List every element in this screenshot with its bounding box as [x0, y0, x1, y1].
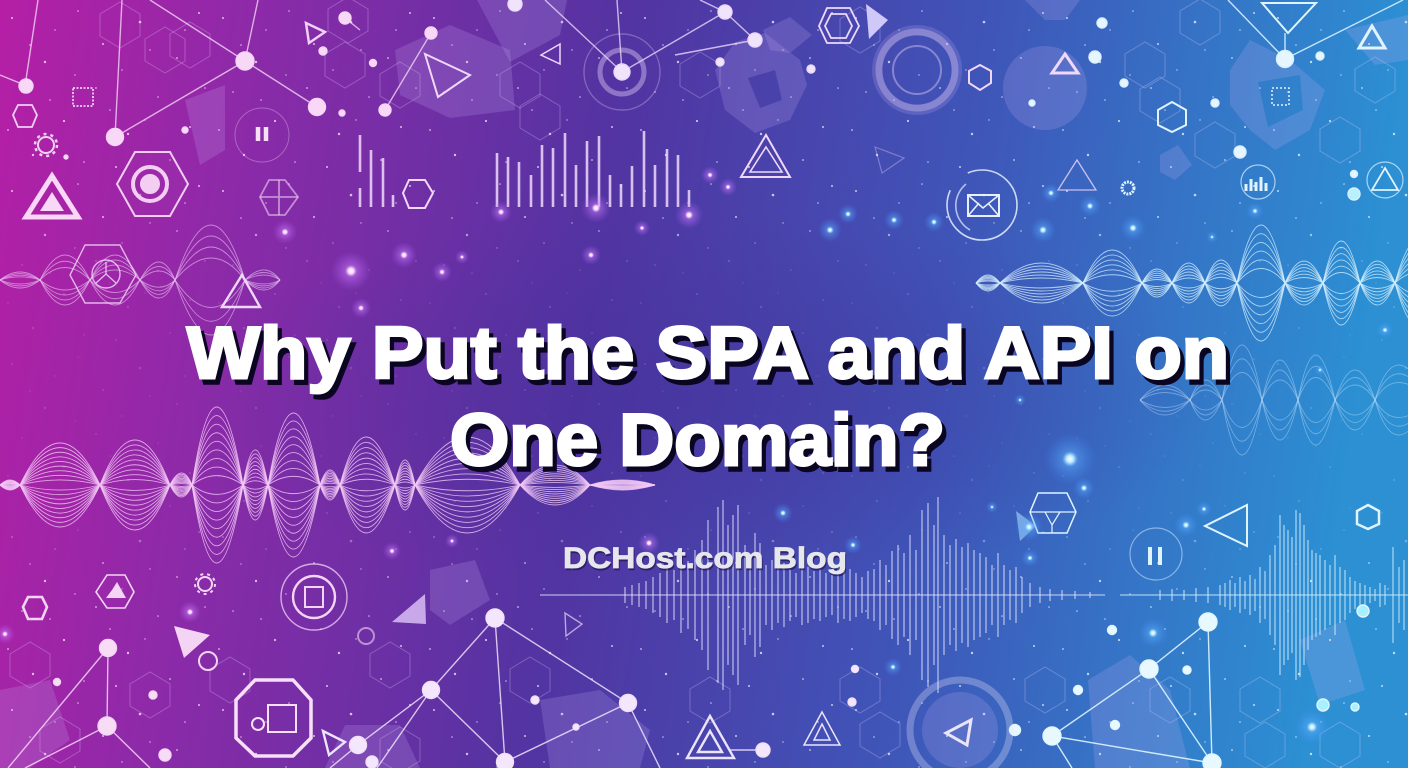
icons: right middle cluster — [1016, 493, 1379, 580]
audio waveform: bottom centre — [540, 497, 1105, 693]
network: bottom centre — [330, 609, 858, 768]
title line 1 shadow: Why Put the SPA and API on — [191, 318, 1233, 399]
icon: hexagon clock on left wave — [70, 245, 136, 303]
title line 2: One Domain? — [450, 400, 945, 481]
icon: small gear, chip, octagon, bar hexagon, flower top left — [13, 23, 325, 215]
icon: triangle outlines top — [222, 4, 1096, 307]
network: bottom left — [8, 640, 171, 768]
equalizer bars: top centre — [360, 131, 689, 207]
wave: left upper — [0, 225, 280, 335]
title line 1: Why Put the SPA and API on — [187, 313, 1229, 394]
glowing particles: magenta — [0, 166, 737, 644]
wave: right upper — [976, 225, 1408, 341]
icon: octagon document — [236, 680, 311, 756]
wave: right middle faint — [1140, 345, 1408, 455]
network: bottom right — [1010, 605, 1369, 768]
icons: bottom left cluster — [23, 564, 582, 670]
icon: large triangle left — [26, 176, 78, 217]
wave: left large — [0, 407, 655, 563]
icon: hexagon target — [117, 152, 188, 216]
network: top left — [0, 0, 437, 159]
audio waveform: bottom right — [1120, 510, 1408, 680]
network: top right — [1029, 0, 1403, 200]
subtitle shadow: DCHost.com Blog — [564, 544, 848, 577]
subtitle: DCHost.com Blog — [563, 542, 847, 575]
icons: bottom centre triangles — [323, 680, 1010, 768]
icon: envelope in circle — [947, 170, 1017, 240]
icons: top right cluster — [1122, 3, 1403, 199]
glowing particles: blue — [773, 183, 1394, 745]
network: top centre — [508, 0, 815, 110]
title line 2 shadow: One Domain? — [454, 405, 949, 486]
